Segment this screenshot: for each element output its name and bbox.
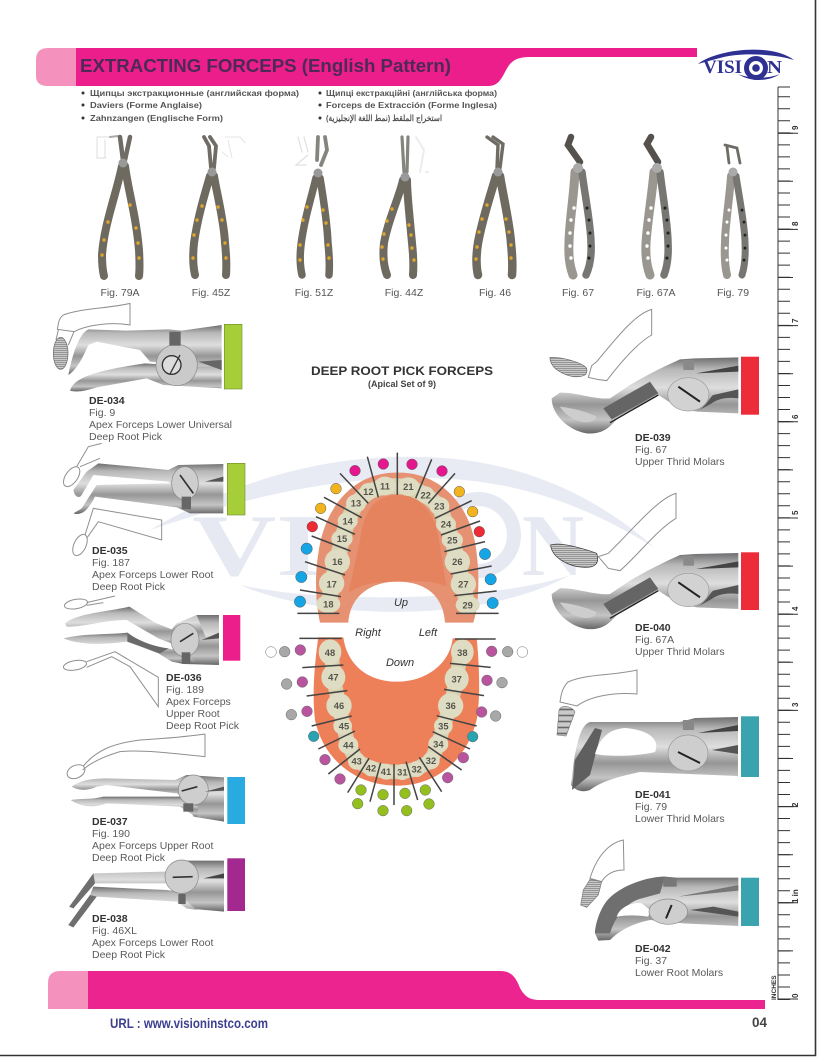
instrument DE-041 — [557, 670, 759, 825]
color bar — [227, 463, 245, 515]
ruler: 3 — [791, 702, 800, 707]
color bar — [224, 324, 242, 389]
label: Deep Root Pick — [92, 581, 166, 593]
heading: deep root pick forceps: DEEP ROOT PICK FORCEPS — [311, 364, 493, 378]
label: DE-039 — [635, 432, 671, 444]
color bar — [741, 716, 759, 777]
instrument DE-035 — [60, 443, 245, 593]
forceps figure labels: Fig. 51Z — [295, 287, 334, 299]
instrument DE-036 — [63, 596, 240, 732]
multilingual subtitle list: Forceps de Extracción (Forme Inglesa) — [326, 100, 497, 110]
tooth numbers: 37 — [451, 674, 462, 684]
label: Apex Forceps Lower Universal — [89, 419, 232, 431]
forceps row — [97, 136, 745, 276]
label: Lower Thrid Molars — [635, 813, 725, 825]
tooth numbers: 47 — [328, 673, 339, 683]
forceps Fig. 79A — [97, 136, 140, 276]
label: Deep Root Pick — [166, 720, 240, 732]
label: Deep Root Pick — [92, 852, 166, 864]
tooth numbers: 44 — [343, 740, 354, 750]
heading: deep root pick forceps — [311, 364, 493, 389]
label: Apex Forceps — [166, 696, 231, 708]
tooth numbers — [325, 648, 468, 777]
tooth numbers: 14 — [342, 516, 354, 526]
label: Fig. 9 — [89, 407, 115, 419]
multilingual subtitle list: Zahnzangen (Englische Form) — [90, 113, 223, 123]
tooth numbers: 31 — [397, 767, 408, 777]
tooth numbers: 18 — [323, 599, 334, 609]
dental chart direction labels: Right — [355, 627, 382, 639]
watermark logo: VISI — [192, 498, 432, 595]
tooth numbers: 12 — [363, 487, 374, 497]
label: Fig. 187 — [92, 557, 130, 569]
instrument DE-034 — [53, 303, 242, 443]
dental chart: upper arch — [294, 453, 499, 623]
forceps Fig. 46 — [476, 137, 512, 275]
forceps figure labels: Fig. 45Z — [192, 287, 231, 299]
tooth numbers — [323, 481, 473, 610]
footer URL: URL : www.visioninstco.com — [110, 1015, 268, 1031]
logo: Vision: N — [767, 57, 782, 77]
label: DE-038 — [92, 913, 128, 925]
tooth numbers: 32 — [411, 764, 422, 774]
title: EXTRACTING FORCEPS (English Pattern) — [80, 55, 451, 76]
tooth numbers: 42 — [366, 764, 376, 774]
label: Upper Thrid Molars — [635, 646, 725, 658]
label: Apex Forceps Lower Root — [92, 569, 213, 581]
forceps figure labels: Fig. 67 — [562, 287, 594, 299]
footer band — [48, 971, 765, 1009]
dental chart direction labels: Up — [394, 597, 408, 609]
label: Fig. 190 — [92, 828, 130, 840]
watermark logo: N — [522, 498, 584, 595]
forceps Fig. 67 — [568, 137, 591, 275]
multilingual subtitle list: Щипці екстракційні (англійська форма) — [326, 88, 497, 98]
ruler: 0 — [791, 993, 800, 998]
color bar — [227, 777, 245, 824]
forceps figure labels — [100, 287, 749, 299]
tooth numbers: 43 — [351, 756, 362, 766]
instrument DE-042 — [581, 840, 759, 979]
label: DE-042 — [635, 943, 671, 955]
multilingual subtitle list: استخراج الملقط (نمط اللغة الإنجليزية) — [326, 113, 442, 124]
tooth numbers: 15 — [337, 534, 347, 544]
instrument DE-038 — [68, 858, 245, 961]
label: Upper Thrid Molars — [635, 456, 725, 468]
label: Upper Root — [166, 708, 220, 720]
forceps Fig. 67A — [646, 137, 668, 275]
tooth numbers: 38 — [457, 648, 468, 658]
tooth numbers: 22 — [420, 490, 431, 500]
color dots — [294, 459, 498, 609]
multilingual subtitle list: Daviers (Forme Anglaise) — [90, 100, 202, 110]
forceps figure labels: Fig. 79A — [100, 287, 140, 299]
label: Fig. 46XL — [92, 925, 137, 937]
tooth numbers: 25 — [447, 535, 458, 545]
label: Apex Forceps Upper Root — [92, 840, 213, 852]
label: Fig. 189 — [166, 684, 204, 696]
tooth numbers: 17 — [326, 579, 337, 589]
tooth numbers: 46 — [334, 701, 344, 711]
page number: 04 — [752, 1014, 767, 1030]
multilingual subtitle list — [82, 88, 497, 124]
label: DE-036 — [166, 672, 202, 684]
tooth numbers: 34 — [433, 739, 444, 749]
color bar — [227, 858, 245, 911]
logo: Vision: VISI — [703, 57, 742, 78]
dental chart direction labels — [355, 597, 438, 669]
color dots — [266, 645, 528, 816]
ruler: 6 — [791, 414, 800, 419]
label: Deep Root Pick — [89, 431, 163, 443]
forceps Fig. 45Z — [193, 137, 245, 275]
tooth numbers: 23 — [434, 501, 445, 511]
ruler: 4 — [791, 606, 800, 611]
label: Fig. 67 — [635, 444, 667, 456]
logo: Vision — [698, 50, 794, 80]
tooth numbers: 29 — [462, 600, 473, 610]
dental chart direction labels: Left — [419, 627, 438, 639]
tooth numbers: 24 — [441, 520, 452, 530]
label: Fig. 67A — [635, 634, 674, 646]
instrument DE-039 — [550, 309, 759, 468]
dental chart direction labels: Down — [386, 657, 414, 669]
color bar — [223, 615, 240, 661]
label: DE-035 — [92, 545, 128, 557]
label: Deep Root Pick — [92, 949, 166, 961]
label: Apex Forceps Lower Root — [92, 937, 213, 949]
ruler: 5 — [791, 510, 800, 515]
label: DE-041 — [635, 789, 671, 801]
label: Fig. 37 — [635, 955, 667, 967]
multilingual subtitle list: Щипцы экстракционные (английская форма) — [90, 88, 299, 98]
tooth numbers: 35 — [438, 721, 449, 731]
label: Lower Root Molars — [635, 967, 723, 979]
label: Fig. 79 — [635, 801, 667, 813]
dental chart: lower arch — [266, 637, 528, 816]
label: DE-040 — [635, 622, 671, 634]
forceps figure labels: Fig. 79 — [717, 287, 749, 299]
instrument DE-037 — [65, 734, 245, 864]
ruler: 2 — [791, 802, 800, 807]
label: DE-034 — [89, 395, 125, 407]
ruler — [771, 87, 800, 1000]
ruler: INCHES — [771, 975, 778, 1000]
tooth numbers: 13 — [351, 499, 361, 509]
tooth numbers: 45 — [339, 721, 349, 731]
tooth numbers: 41 — [381, 767, 391, 777]
forceps figure labels: Fig. 44Z — [385, 287, 424, 299]
color bar — [741, 878, 759, 926]
color bar — [741, 357, 759, 415]
forceps figure labels: Fig. 46 — [479, 287, 511, 299]
ruler: 1 in — [791, 889, 800, 903]
color bar — [741, 552, 759, 610]
tooth numbers: 11 — [380, 481, 390, 491]
forceps figure labels: Fig. 67A — [636, 287, 676, 299]
ruler: 8 — [791, 221, 800, 226]
forceps Fig. 51Z — [296, 137, 329, 275]
heading: deep root pick forceps: (Apical Set of 9) — [368, 379, 436, 389]
tooth numbers: 48 — [325, 648, 335, 658]
guide lines — [297, 453, 499, 613]
tooth numbers: 27 — [458, 579, 469, 589]
guide lines — [299, 638, 496, 805]
forceps Fig. 44Z — [382, 137, 428, 275]
ruler: 9 — [791, 125, 800, 130]
tooth numbers: 26 — [452, 557, 463, 567]
header band — [36, 48, 697, 86]
tooth numbers: 21 — [403, 482, 414, 492]
instrument DE-040 — [551, 493, 759, 658]
tooth numbers: 32 — [426, 756, 436, 766]
label: DE-037 — [92, 816, 128, 828]
tooth numbers: 36 — [445, 701, 456, 711]
forceps Fig. 79 — [725, 145, 745, 275]
ruler: 7 — [791, 318, 800, 323]
tooth numbers: 16 — [332, 557, 343, 567]
watermark logo — [150, 457, 655, 612]
